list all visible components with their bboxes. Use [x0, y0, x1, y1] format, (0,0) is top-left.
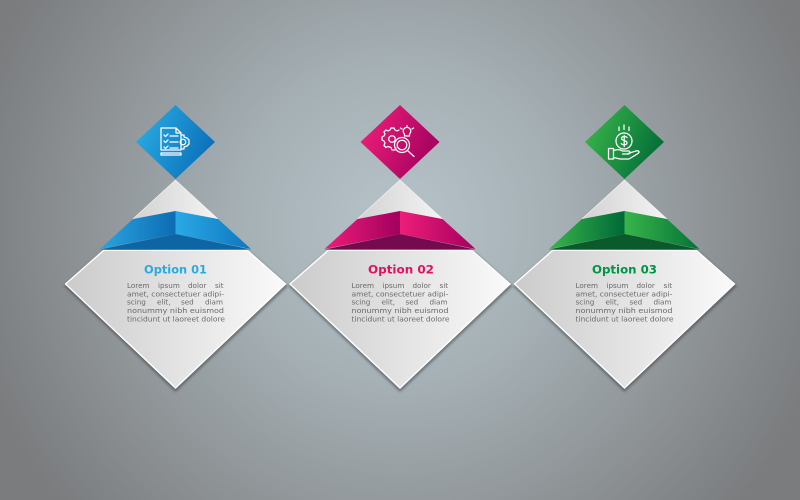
card shadow [64, 252, 288, 392]
body text: nonummy nibh euismod [127, 306, 224, 315]
body text: Lorem [352, 281, 374, 290]
body text: amet, consectetuer adipi- [576, 289, 673, 298]
panel: option 01 [64, 105, 288, 392]
body text: diam [430, 298, 447, 307]
card shadow [288, 252, 512, 392]
body text: elit, [606, 298, 619, 307]
body text: tincidunt ut laoreet dolore [127, 314, 226, 323]
folded ribbon [549, 211, 700, 250]
body text [576, 281, 674, 323]
body text: scing [352, 298, 370, 307]
card body [64, 250, 286, 389]
icon diamond [360, 105, 440, 179]
body text: sit [215, 281, 224, 290]
icon: gear, magnifier and bulb [382, 126, 414, 156]
card shadow [513, 252, 737, 392]
body text: ipsum [158, 281, 180, 290]
body text [352, 281, 450, 323]
body text: sit [440, 281, 448, 290]
card body [289, 250, 511, 389]
body text: dolor [636, 281, 655, 290]
folded ribbon [324, 211, 476, 250]
icon: checklist and gear [161, 128, 189, 155]
panel: option 02 [288, 105, 512, 392]
body text: sed [181, 298, 194, 307]
body text: Lorem [576, 281, 598, 290]
body text: tincidunt ut laoreet dolore [352, 314, 450, 323]
body text: ipsum [382, 281, 404, 290]
heading: Option 03 [592, 262, 657, 276]
body text: amet, consectetuer adipi- [127, 289, 224, 298]
body text: amet, consectetuer adipi- [352, 289, 449, 298]
body text: tincidunt ut laoreet dolore [576, 314, 674, 323]
body text: Lorem [127, 281, 150, 290]
folded ribbon [100, 211, 251, 250]
body text: sed [630, 298, 642, 307]
body text: nonummy nibh euismod [576, 306, 672, 315]
body text: dolor [412, 281, 431, 290]
top triangle [358, 180, 442, 219]
body text: elit, [157, 298, 171, 307]
icon: hand holding coin [608, 125, 639, 159]
body text: dolor [188, 281, 206, 290]
body text: elit, [382, 298, 395, 307]
heading: Option 02 [368, 262, 434, 276]
heading: Option 01 [144, 262, 207, 276]
body text: scing [576, 298, 594, 307]
body text: diam [654, 298, 671, 307]
icon diamond [136, 105, 215, 179]
top triangle [133, 180, 218, 219]
icon diamond [585, 105, 664, 179]
body text [127, 281, 226, 323]
body text: nonummy nibh euismod [352, 306, 448, 315]
body text: diam [205, 298, 223, 307]
body text: ipsum [606, 281, 628, 290]
body text: scing [127, 298, 146, 307]
card body [514, 250, 736, 389]
top triangle [582, 180, 667, 219]
body text: sit [664, 281, 672, 290]
panel: option 03 [513, 105, 737, 392]
body text: sed [406, 298, 418, 307]
